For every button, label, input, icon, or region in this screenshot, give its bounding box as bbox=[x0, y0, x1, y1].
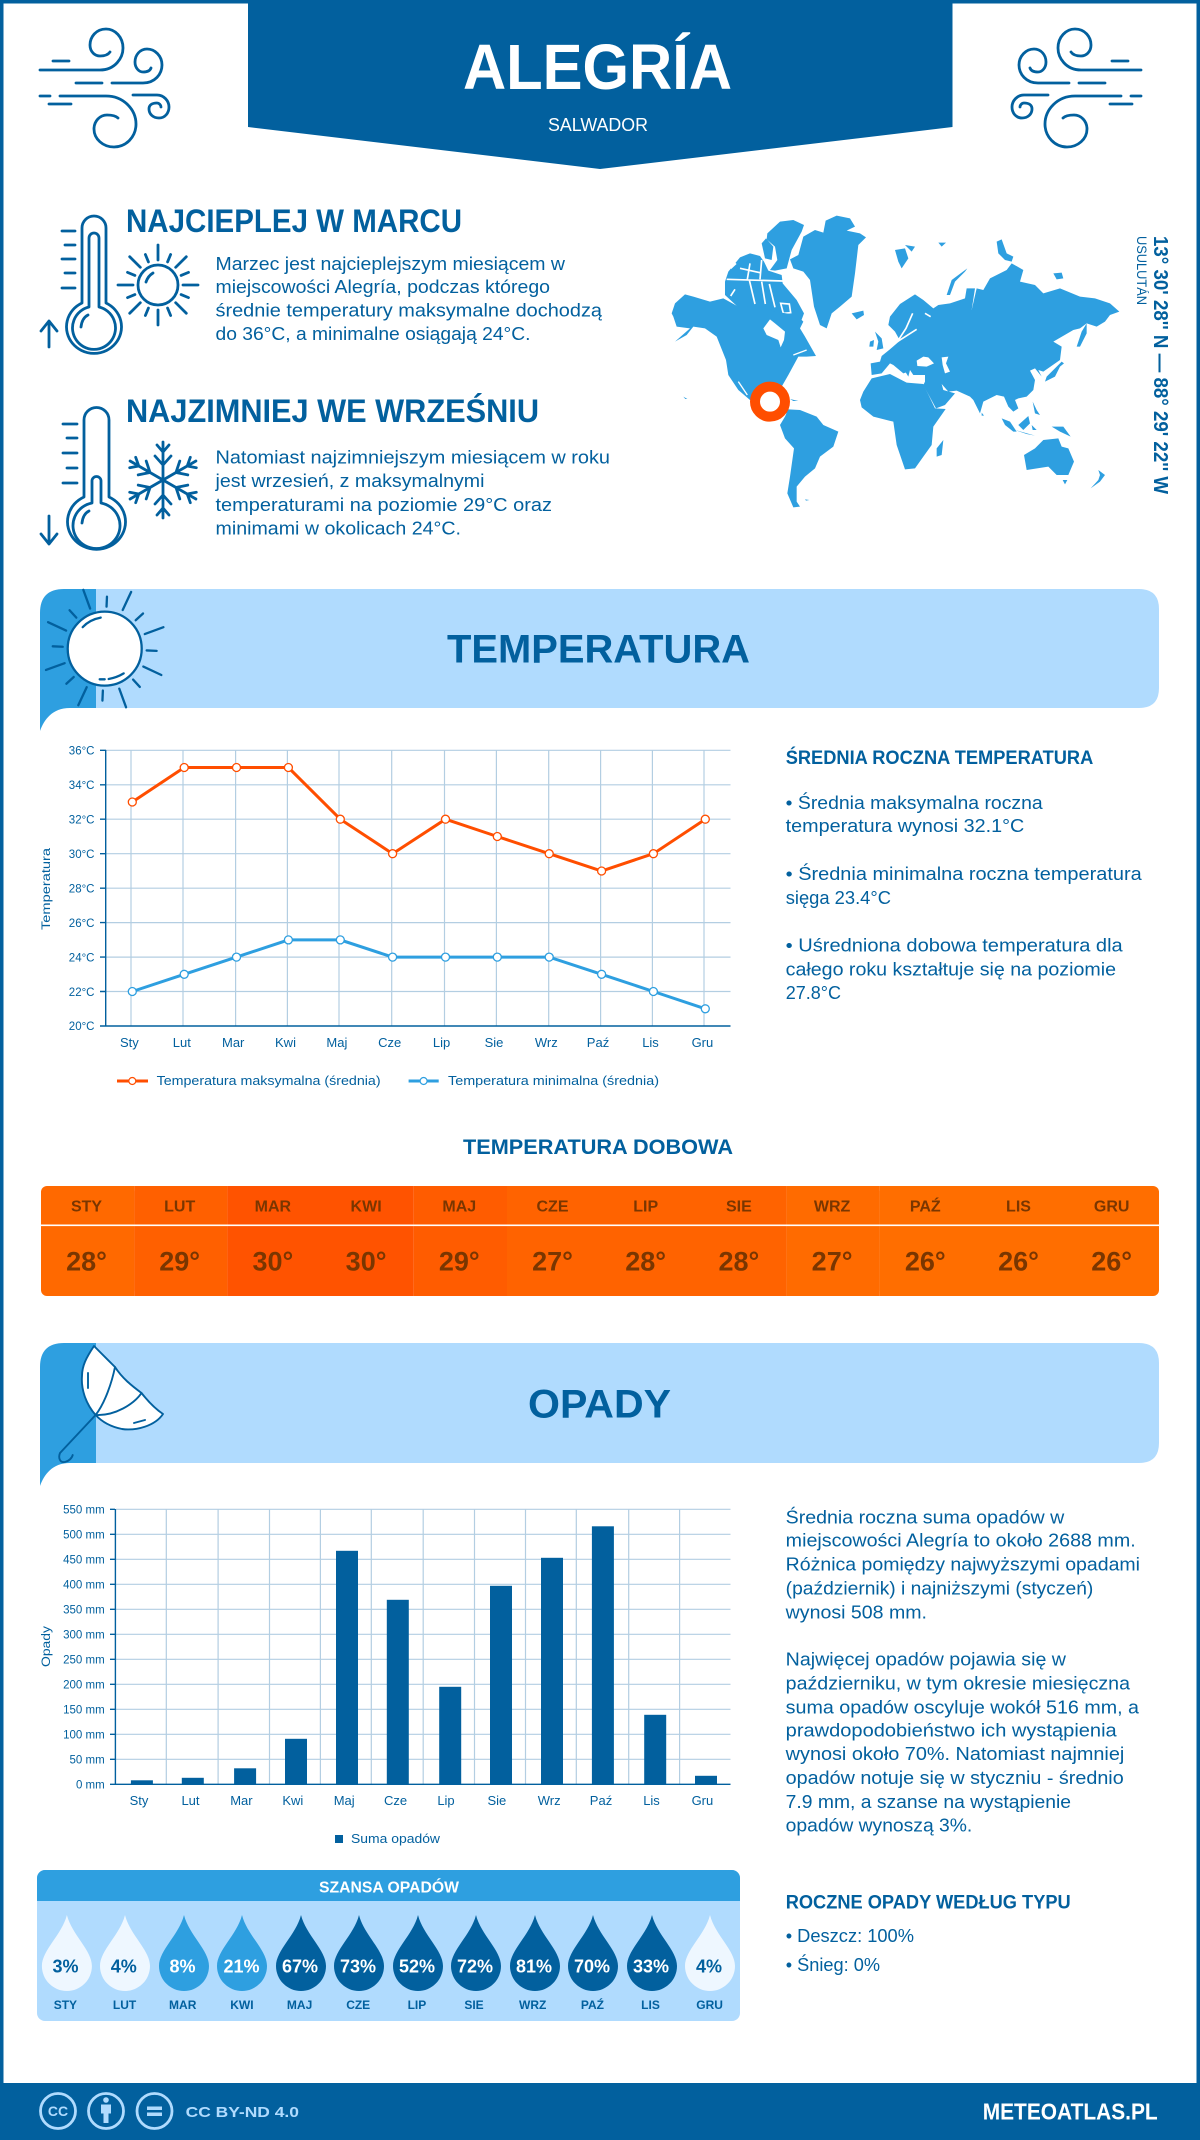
line chart: temperature: Mar bbox=[222, 1035, 245, 1050]
bar chart: precipitation: Lip bbox=[437, 1793, 455, 1808]
subtitle: country: SALWADOR bbox=[548, 115, 648, 135]
text: coldest month: temperaturami na poziomie 29°C oraz bbox=[216, 494, 552, 515]
line chart: temperature: Maj bbox=[326, 1035, 347, 1050]
text: annual temperature: ŚREDNIA ROCZNA TEMPERATURA bbox=[786, 747, 1094, 769]
table: daily temperature: LIS bbox=[1006, 1198, 1031, 1216]
line chart: temperature: 34°C bbox=[69, 780, 94, 792]
line chart: temperature: Paź bbox=[587, 1035, 609, 1050]
bar chart: precipitation: 200 mm bbox=[63, 1680, 105, 1692]
drop months bbox=[54, 1997, 723, 2012]
text: annual temperature: całego roku kształtuje się na poziomie bbox=[786, 958, 1116, 980]
table: daily temperature: 29° bbox=[439, 1246, 480, 1276]
line chart: temperature: Cze bbox=[378, 1035, 401, 1050]
icon: cc licence bbox=[40, 2094, 172, 2128]
table: daily temperature: 27° bbox=[532, 1246, 573, 1276]
text: annual precipitation: Różnica pomiędzy najwyższymi opadami bbox=[786, 1554, 1140, 1574]
drop percentages: 3% bbox=[52, 1956, 79, 1976]
text: coldest month: Natomiast najzimniejszym miesiącem w roku bbox=[216, 446, 610, 468]
table: daily temperature: LUT bbox=[164, 1198, 195, 1216]
drop months: MAJ bbox=[287, 1998, 312, 2012]
drop months: LIP bbox=[408, 1998, 426, 2012]
bar chart: precipitation: Lut bbox=[181, 1793, 200, 1808]
bar chart: precipitation: Gru bbox=[692, 1793, 713, 1808]
drop percentages: 8% bbox=[169, 1956, 196, 1976]
table: daily temperature: 26° bbox=[998, 1246, 1039, 1276]
table: daily temperature: CZE bbox=[536, 1198, 569, 1216]
heading: hottest month: NAJCIEPLEJ W MARCU bbox=[126, 203, 462, 239]
text: annual precipitation: październiku, w tym okresie miesięczna bbox=[786, 1672, 1131, 1694]
text: annual temperature: 27.8°C bbox=[786, 982, 841, 1003]
text: annual temperature: sięga 23.4°C bbox=[786, 887, 891, 908]
drop percentages: 52% bbox=[399, 1956, 435, 1976]
table: daily temperature: KWI bbox=[351, 1198, 382, 1216]
bar chart: precipitation: Sty bbox=[130, 1793, 149, 1808]
bar chart: precipitation: 500 mm bbox=[63, 1530, 105, 1542]
bar chart: precipitation: 250 mm bbox=[63, 1654, 105, 1666]
icon: wind right bbox=[1012, 29, 1141, 147]
footer bbox=[0, 2083, 1200, 2140]
drop percentages: 4% bbox=[696, 1956, 722, 1976]
heading: temperature: TEMPERATURA bbox=[447, 628, 750, 672]
icon: cold thermometer bbox=[41, 407, 126, 549]
chart legend: Temperatura maksymalna (średnia) bbox=[157, 1073, 381, 1088]
bar chart: precipitation: 100 mm bbox=[63, 1730, 105, 1742]
text: annual precipitation: opadów notuje się w styczniu - średnio bbox=[786, 1767, 1124, 1788]
text: hottest month: miejscowości Alegría, podczas którego bbox=[216, 276, 550, 297]
line chart: temperature: Sie bbox=[485, 1035, 503, 1050]
line chart: temperature: Lip bbox=[433, 1035, 450, 1050]
text: annual precipitation: suma opadów oscyluje wokół 516 mm, a bbox=[786, 1696, 1140, 1718]
text: annual precipitation: Średnia roczna suma opadów w bbox=[786, 1506, 1065, 1528]
table: daily temperature: SIE bbox=[726, 1198, 752, 1216]
bar chart: precipitation: 400 mm bbox=[63, 1580, 105, 1592]
drop percentages: 21% bbox=[223, 1956, 260, 1976]
text: annual precipitation: 7.9 mm, a szanse na wystąpienie bbox=[786, 1791, 1071, 1812]
line chart: temperature: Lis bbox=[642, 1035, 659, 1050]
table: daily temperature: 27° bbox=[812, 1246, 853, 1276]
line chart: temperature: 28°C bbox=[69, 884, 94, 896]
bar chart: precipitation: 150 mm bbox=[63, 1704, 105, 1716]
drop months: SIE bbox=[464, 1998, 484, 2012]
table: daily temperature: 29° bbox=[159, 1246, 200, 1276]
heading: daily temperature: TEMPERATURA DOBOWA bbox=[463, 1136, 733, 1159]
icon: cc licence: CC bbox=[48, 2103, 68, 2119]
drop months: KWI bbox=[230, 1998, 254, 2012]
table: daily temperature: 28° bbox=[625, 1246, 666, 1276]
drop months: STY bbox=[54, 1998, 77, 2012]
line chart: temperature: Kwi bbox=[275, 1035, 296, 1050]
licence text: CC BY-ND 4.0 bbox=[186, 2104, 299, 2121]
line chart: temperature: Gru bbox=[692, 1035, 713, 1050]
icon: umbrella bbox=[59, 1346, 163, 1462]
text: hottest month: do 36°C, a minimalne osiągają 24°C. bbox=[216, 323, 530, 344]
drop months: LIS bbox=[641, 1998, 660, 2012]
heading: chance of precipitation: SZANSA OPADÓW bbox=[319, 1878, 460, 1896]
table: daily temperature: MAR bbox=[255, 1198, 292, 1216]
table: daily temperature: WRZ bbox=[814, 1198, 851, 1216]
line chart: temperature: Lut bbox=[173, 1035, 191, 1050]
text: annual temperature bbox=[786, 747, 1142, 1003]
series: min temperature bbox=[128, 936, 709, 1013]
bar chart: precipitation: 350 mm bbox=[63, 1604, 105, 1616]
bar chart: precipitation: 50 mm bbox=[70, 1754, 105, 1766]
line chart: temperature: 26°C bbox=[69, 918, 94, 930]
bar chart: precipitation: Maj bbox=[334, 1793, 355, 1808]
heading: coldest month: NAJZIMNIEJ WE WRZEŚNIU bbox=[126, 393, 539, 429]
bar chart: precipitation: Sie bbox=[488, 1793, 506, 1808]
heading: precipitation: OPADY bbox=[528, 1382, 671, 1426]
drop percentages: 73% bbox=[340, 1956, 376, 1976]
table: daily temperature: MAJ bbox=[442, 1198, 476, 1216]
text: precipitation by type: • Deszcz: 100% bbox=[786, 1925, 914, 1946]
icon: sun bbox=[118, 245, 198, 325]
bar chart: precipitation: 300 mm bbox=[63, 1630, 105, 1642]
table: daily temperature: PAŹ bbox=[910, 1196, 941, 1216]
line chart: temperature: 32°C bbox=[69, 814, 94, 826]
line chart: temperature bbox=[41, 746, 730, 1088]
table: daily temperature: STY bbox=[71, 1198, 102, 1216]
bar chart: precipitation: 450 mm bbox=[63, 1554, 105, 1566]
panel: chance of precipitation bbox=[37, 1870, 740, 2021]
world map bbox=[672, 216, 1119, 507]
text: annual precipitation: prawdopodobieństwo ich wystąpienia bbox=[786, 1720, 1117, 1740]
drop months: CZE bbox=[346, 1998, 370, 2012]
table: daily temperature: 28° bbox=[718, 1246, 759, 1276]
table: daily temperature: 26° bbox=[905, 1246, 946, 1276]
text: annual temperature: • Uśredniona dobowa temperatura dla bbox=[786, 934, 1123, 956]
brand: METEOATLAS.PL bbox=[983, 2098, 1158, 2124]
header banner bbox=[248, 0, 952, 169]
text: annual precipitation: Najwięcej opadów pojawia się w bbox=[786, 1648, 1067, 1670]
text: annual precipitation bbox=[785, 1506, 1140, 1836]
text: annual precipitation: wynosi około 70%. Natomiast najmniej bbox=[785, 1743, 1124, 1764]
text: precipitation by type bbox=[786, 1892, 1071, 1975]
bar chart: precipitation bbox=[41, 1504, 730, 1846]
drop months: GRU bbox=[696, 1998, 723, 2012]
text: annual precipitation: wynosi 508 mm. bbox=[785, 1602, 927, 1622]
text: coldest month bbox=[214, 446, 610, 538]
text: annual temperature: • Średnia minimalna roczna temperatura bbox=[786, 863, 1142, 884]
text: precipitation by type: ROCZNE OPADY WEDŁUG TYPU bbox=[786, 1892, 1071, 1914]
line chart: temperature: Sty bbox=[120, 1035, 139, 1050]
table: daily temperature: 28° bbox=[66, 1246, 107, 1276]
text: hottest month bbox=[216, 253, 603, 344]
marker: location bbox=[755, 387, 785, 417]
drop percentages bbox=[52, 1956, 722, 1976]
text: annual precipitation: (październik) i najniższymi (styczeń) bbox=[786, 1578, 1093, 1598]
bar chart: precipitation: Lis bbox=[643, 1793, 660, 1808]
drops bbox=[42, 1915, 735, 1991]
line chart: temperature: 24°C bbox=[69, 952, 94, 964]
text: coldest month: jest wrzesień, z maksymalnymi bbox=[214, 470, 484, 491]
drop months: WRZ bbox=[519, 1998, 546, 2012]
line chart: temperature: 20°C bbox=[69, 1021, 94, 1033]
bar chart: precipitation: Mar bbox=[230, 1793, 253, 1808]
drop percentages: 67% bbox=[282, 1956, 318, 1976]
text: coldest month: minimami w okolicach 24°C. bbox=[216, 518, 461, 538]
text: annual temperature: temperatura wynosi 32.1°C bbox=[786, 815, 1024, 836]
bar chart: precipitation: Wrz bbox=[538, 1793, 561, 1808]
series: max temperature bbox=[128, 764, 709, 875]
text: annual precipitation: opadów wynoszą 3%. bbox=[786, 1814, 972, 1836]
panel: temperature banner bbox=[40, 589, 1159, 731]
icon: hot thermometer bbox=[41, 216, 122, 353]
bar chart: precipitation: 0 mm bbox=[76, 1780, 105, 1792]
chart legend bbox=[117, 1073, 659, 1088]
icon: snowflake bbox=[126, 442, 200, 518]
panel: precipitation banner bbox=[40, 1343, 1159, 1486]
region name: USULUTÁN bbox=[1134, 236, 1149, 305]
text: hottest month: średnie temperatury maksymalne dochodzą bbox=[216, 300, 603, 320]
text: annual precipitation: miejscowości Alegría to około 2688 mm. bbox=[786, 1530, 1136, 1550]
text: precipitation by type: • Śnieg: 0% bbox=[786, 1954, 880, 1975]
icon: sun large bbox=[46, 590, 163, 707]
drop percentages: 33% bbox=[633, 1956, 669, 1976]
table: daily temperature: LIP bbox=[633, 1198, 658, 1216]
coordinates: 13° 30' 28'' N — 88° 29' 22'' W bbox=[1149, 236, 1171, 494]
title: ALEGRÍA bbox=[463, 31, 732, 103]
text: annual temperature: • Średnia maksymalna roczna bbox=[786, 792, 1043, 813]
icon: wind left bbox=[40, 29, 169, 147]
chart legend: Suma opadów bbox=[351, 1831, 441, 1846]
line chart: temperature: 30°C bbox=[69, 849, 94, 861]
line chart: temperature: 36°C bbox=[69, 746, 94, 758]
bar chart: precipitation: Cze bbox=[384, 1793, 407, 1808]
bar chart: precipitation: Paź bbox=[590, 1793, 612, 1808]
bar chart: precipitation: Opady bbox=[41, 1626, 53, 1667]
text: hottest month: Marzec jest najcieplejszym miesiącem w bbox=[216, 253, 566, 274]
line chart: temperature: 22°C bbox=[69, 987, 94, 999]
table: daily temperature bbox=[41, 1186, 1159, 1296]
drop percentages: 81% bbox=[516, 1956, 552, 1976]
drop percentages: 72% bbox=[457, 1956, 493, 1976]
table: daily temperature: GRU bbox=[1094, 1198, 1129, 1216]
drop percentages: 4% bbox=[111, 1956, 137, 1976]
bar chart: precipitation: 550 mm bbox=[63, 1504, 105, 1516]
line chart: temperature: Temperatura bbox=[41, 847, 53, 930]
chart legend: Temperatura minimalna (średnia) bbox=[448, 1073, 659, 1088]
table: daily temperature: 30° bbox=[252, 1246, 293, 1276]
table: daily temperature: 26° bbox=[1091, 1246, 1132, 1276]
drop months: PAŹ bbox=[581, 1997, 604, 2012]
bar chart: precipitation: Kwi bbox=[282, 1793, 303, 1808]
line chart: temperature: Wrz bbox=[535, 1035, 558, 1050]
drop months: LUT bbox=[113, 1998, 137, 2012]
table: daily temperature: 30° bbox=[346, 1246, 387, 1276]
drop percentages: 70% bbox=[574, 1956, 610, 1976]
drop months: MAR bbox=[169, 1998, 197, 2012]
